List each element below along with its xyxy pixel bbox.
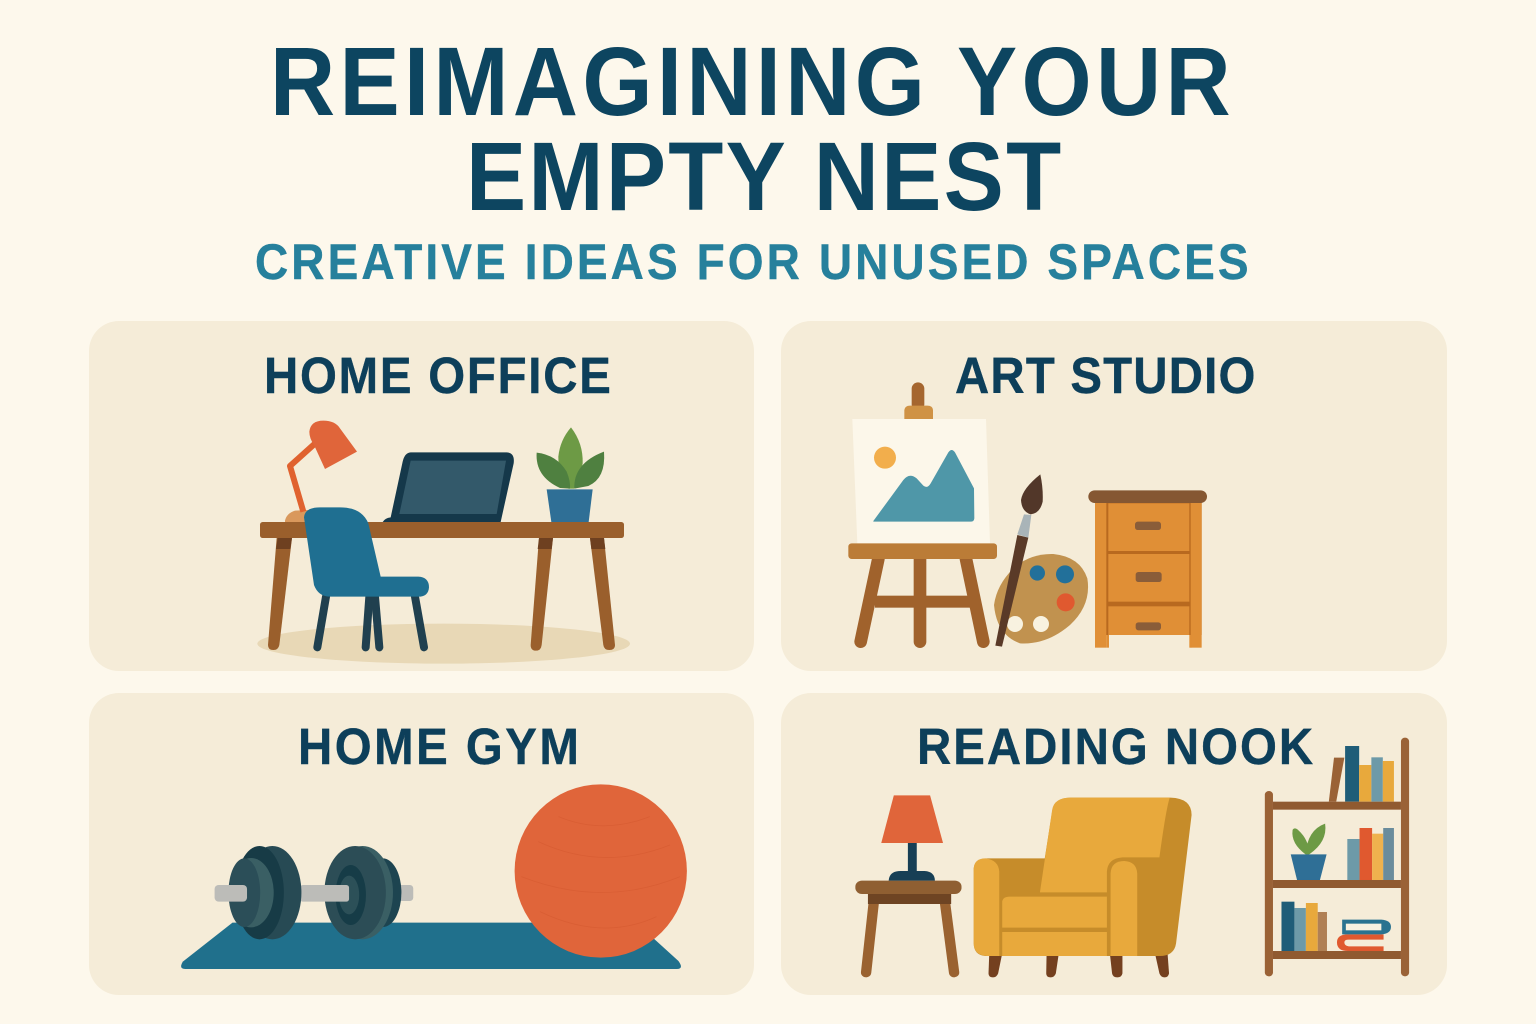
heading: home office: HOME OFFICE — [264, 347, 611, 404]
illustration: reading corner — [855, 738, 1409, 977]
icon: potted plant — [537, 427, 604, 522]
panel: reading nook — [781, 693, 1447, 995]
illustration: gym equipment — [181, 784, 687, 969]
top shelf books — [1329, 746, 1394, 802]
title: EMPTY NEST — [466, 122, 1061, 231]
icon: drawer cabinet — [1088, 490, 1207, 648]
desk — [260, 522, 624, 651]
icon: bookshelf — [1265, 738, 1409, 976]
illustration: desk scene — [257, 421, 630, 664]
middle shelf plant and books — [1291, 824, 1394, 880]
illustration: art corner — [848, 382, 1207, 648]
heading: art studio: ART STUDIO — [955, 347, 1255, 404]
icon: side table with lamp — [855, 795, 962, 973]
subtitle: CREATIVE IDEAS FOR UNUSED SPACES — [255, 235, 1249, 290]
heading: reading nook: READING NOOK — [917, 718, 1314, 775]
panel: home office — [89, 321, 754, 671]
heading: home gym: HOME GYM — [298, 718, 579, 775]
icon: armchair — [974, 798, 1192, 977]
icon: laptop — [383, 452, 514, 522]
icon: easel with canvas — [848, 382, 997, 642]
icon: paintbrush — [995, 474, 1043, 647]
panel: home gym — [89, 693, 754, 995]
floor shadow — [257, 624, 630, 664]
icon: paint palette — [994, 554, 1088, 643]
icon: desk lamp — [285, 421, 357, 522]
title: REIMAGINING YOUR — [270, 27, 1231, 136]
icon: exercise ball — [515, 784, 687, 958]
icon: dumbbell — [215, 846, 413, 939]
title — [270, 27, 1231, 231]
icon: yoga mat — [181, 923, 681, 969]
icon: chair — [304, 507, 429, 647]
bottom shelf books — [1281, 902, 1391, 951]
panel: art studio — [781, 321, 1447, 671]
